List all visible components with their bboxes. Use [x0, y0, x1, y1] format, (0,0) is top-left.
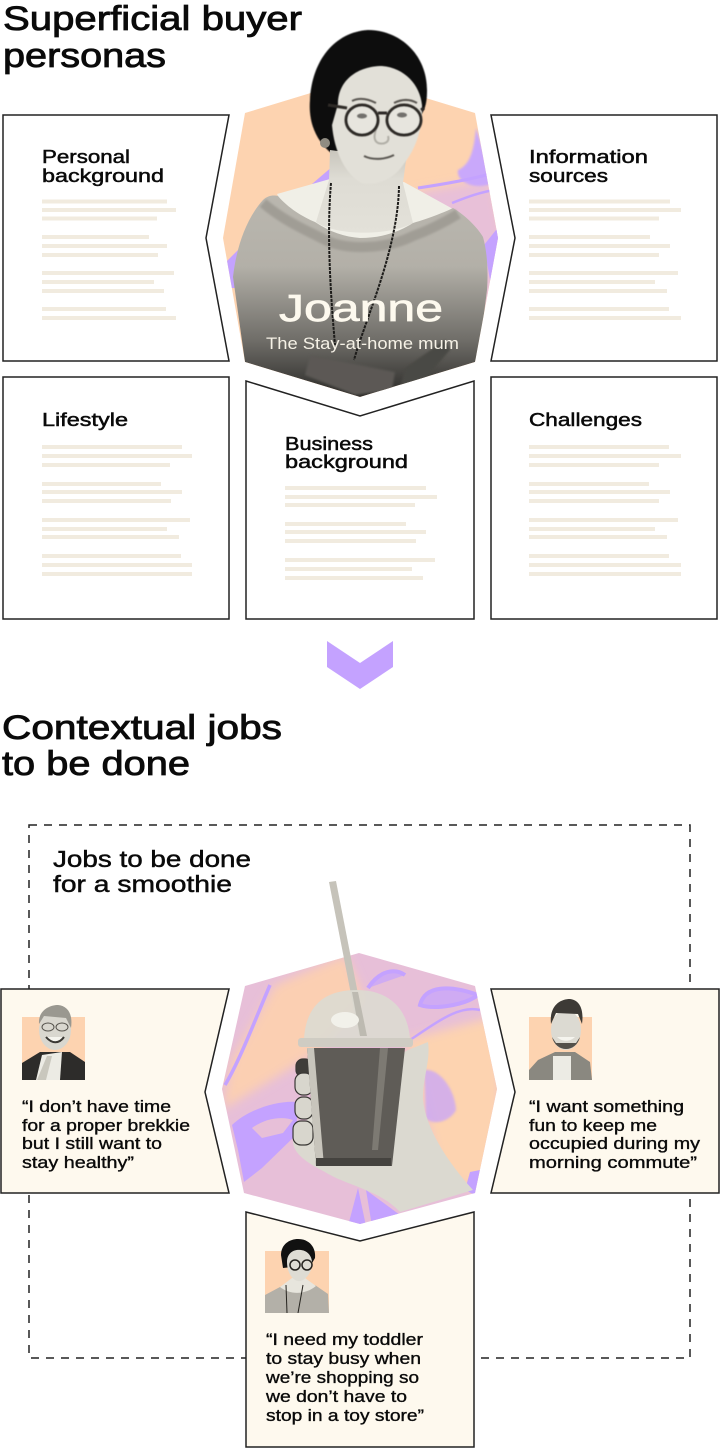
panel: information sources: Information	[529, 146, 648, 167]
panel: quote from businessman: stay healthy”	[22, 1154, 134, 1172]
portrait: earring	[320, 138, 330, 148]
persona tagline: The Stay-at-home mum	[266, 335, 459, 353]
panel: quote from young man	[491, 989, 719, 1193]
hand holding cup	[293, 1042, 473, 1212]
panel: challenges: Challenges	[529, 409, 642, 430]
straw	[329, 881, 366, 1035]
panel: quote from young man: “I want something	[529, 1098, 684, 1116]
panel: quote from young man: morning commute”	[529, 1154, 697, 1172]
portrait: sweater ribbed collar	[263, 203, 458, 247]
panel: personal background: background	[42, 165, 164, 186]
smoothie image on marble octagon	[220, 881, 500, 1226]
portrait: glasses	[328, 105, 424, 135]
avatar: young man	[529, 999, 592, 1080]
portrait: hair	[310, 30, 427, 154]
panel: information sources	[491, 115, 717, 361]
avatar: businessman	[22, 1005, 85, 1080]
panel: business background: background	[285, 451, 408, 472]
portrait: neck and white top	[233, 150, 488, 397]
title: superficial buyer personas: Superficial buyer	[3, 0, 302, 38]
persona portrait: Joanne	[220, 30, 505, 400]
panel: quote from Joanne: “I need my toddler	[266, 1331, 424, 1349]
heading: contextual jobs to be done: Contextual jobs	[2, 709, 282, 747]
cup lid	[304, 990, 410, 1039]
panel: quote from Joanne: to stay busy when	[266, 1350, 421, 1368]
persona name: Joanne: Joanne	[279, 288, 443, 330]
title: superficial buyer personas	[3, 0, 302, 75]
cup rim	[298, 1038, 413, 1047]
panel: information sources: sources	[529, 165, 608, 186]
panel: personal background	[3, 115, 229, 361]
panel: quote from Joanne	[246, 1212, 474, 1447]
title: superficial buyer personas: personas	[3, 37, 166, 75]
panel: quote from businessman: “I don’t have time	[22, 1098, 171, 1116]
panel: quote from Joanne: stop in a toy store”	[266, 1407, 424, 1425]
panel: quote from Joanne: we’re shopping so	[265, 1369, 419, 1387]
panel: challenges	[491, 377, 717, 619]
portrait: necklace	[329, 183, 399, 360]
arrow: chevron down	[327, 641, 393, 689]
panel: lifestyle: Lifestyle	[42, 409, 128, 430]
portrait: eyes and nose	[357, 112, 407, 144]
portrait: folded arms	[305, 363, 395, 396]
panel: quote from young man: occupied during my	[529, 1135, 701, 1153]
panel: business background	[246, 381, 474, 619]
panel: quote from businessman	[1, 989, 229, 1193]
portrait: face	[332, 66, 422, 184]
heading: contextual jobs to be done: to be done	[2, 745, 190, 783]
heading: contextual jobs to be done	[2, 709, 282, 783]
panel: business background: Business	[285, 433, 373, 454]
panel: quote from Joanne: we don’t have to	[265, 1388, 407, 1406]
cup of smoothie	[307, 1048, 405, 1166]
dashed frame	[29, 825, 690, 1358]
portrait: sweater	[233, 195, 488, 397]
panel: personal background: Personal	[42, 146, 130, 167]
subheading: jobs to be done for a smoothie: Jobs to be done	[53, 846, 251, 872]
portrait: eyebrows and mouth	[352, 99, 417, 159]
subheading: jobs to be done for a smoothie: for a smoothie	[53, 871, 232, 897]
subheading: jobs to be done for a smoothie	[53, 846, 251, 897]
panel: quote from businessman: for a proper brekkie	[22, 1117, 190, 1135]
avatar: Joanne	[265, 1239, 329, 1313]
panel: quote from young man: fun to keep me	[529, 1117, 657, 1135]
panel: quote from businessman: but I still want to	[22, 1135, 162, 1153]
panel: lifestyle	[3, 377, 229, 619]
fingers	[293, 1059, 313, 1145]
